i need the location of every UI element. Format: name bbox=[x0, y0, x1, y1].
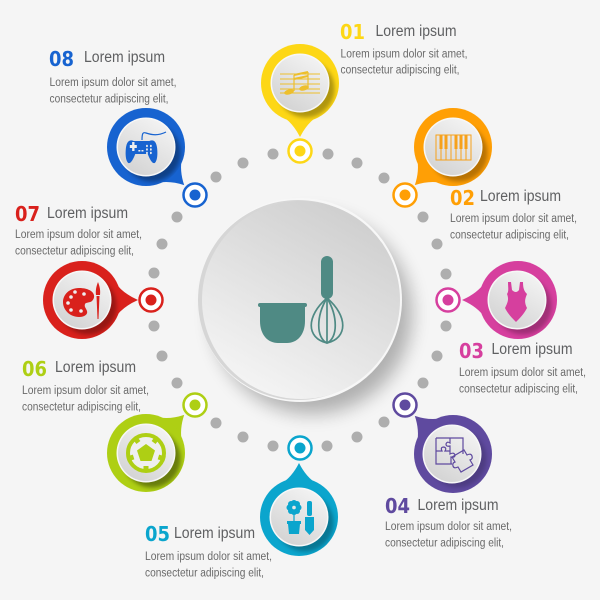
step 08 marker bbox=[107, 108, 206, 206]
step 02 text: Lorem ipsum bbox=[480, 188, 561, 205]
step 08 text: Lorem ipsum dolor sit amet, bbox=[50, 77, 176, 89]
step 05 marker bbox=[260, 436, 338, 556]
step 01 marker bbox=[261, 44, 339, 162]
step 08 text: 08 bbox=[49, 47, 74, 71]
step 05 text: 05 bbox=[145, 522, 170, 546]
step 06 text: Lorem ipsum dolor sit amet, bbox=[22, 385, 149, 397]
step 07 marker bbox=[43, 261, 162, 339]
step 06 text bbox=[22, 357, 149, 414]
step 02 marker bbox=[394, 108, 492, 206]
step 05 text: Lorem ipsum dolor sit amet, bbox=[145, 551, 272, 563]
icon: swimsuit bbox=[505, 282, 527, 322]
icon: flower pot and trowel bbox=[286, 500, 314, 535]
step 04 text: consectetur adipiscing elit, bbox=[385, 538, 504, 550]
step 02 text bbox=[450, 186, 577, 242]
step 08 text: Lorem ipsum bbox=[84, 49, 165, 66]
step 04 text: Lorem ipsum dolor sit amet, bbox=[385, 521, 512, 533]
step 06 text: Lorem ipsum bbox=[55, 359, 136, 376]
icon: soccer ball bbox=[127, 435, 165, 472]
step 06 text: consectetur adipiscing elit, bbox=[22, 402, 141, 414]
step 05 text bbox=[145, 522, 272, 580]
step 03 text: consectetur adipiscing elit, bbox=[459, 384, 578, 396]
icon: bowl and whisk bbox=[258, 256, 343, 343]
step 04 text bbox=[385, 494, 512, 550]
step 08 text: consectetur adipiscing elit, bbox=[50, 94, 168, 106]
step 02 text: 02 bbox=[450, 186, 475, 210]
step 07 text: Lorem ipsum bbox=[47, 205, 128, 222]
step 06 marker bbox=[107, 394, 206, 492]
step 01 text: Lorem ipsum bbox=[376, 23, 456, 40]
step 02 text: Lorem ipsum dolor sit amet, bbox=[450, 213, 577, 225]
step 01 text bbox=[340, 20, 468, 76]
step 03 text: 03 bbox=[459, 339, 484, 363]
step 04 text: 04 bbox=[385, 494, 410, 518]
central disc bbox=[198, 198, 412, 414]
step 07 text: consectetur adipiscing elit, bbox=[15, 246, 134, 258]
step 07 text: Lorem ipsum dolor sit amet, bbox=[15, 229, 142, 241]
step 05 text: Lorem ipsum bbox=[174, 525, 255, 542]
icon: puzzle pieces bbox=[436, 438, 473, 472]
step 01 text: consectetur adipiscing elit, bbox=[340, 64, 460, 76]
icon: piano keys bbox=[436, 135, 471, 160]
icon: paint palette and brush bbox=[63, 282, 100, 319]
step 06 text: 06 bbox=[22, 357, 47, 381]
icon: music notes bbox=[280, 72, 320, 96]
step 04 marker bbox=[394, 394, 492, 493]
step 08 text bbox=[49, 47, 176, 106]
dotted ring bbox=[148, 148, 452, 452]
step 03 marker bbox=[436, 261, 557, 339]
step 03 text: Lorem ipsum bbox=[492, 341, 572, 358]
step 04 text: Lorem ipsum bbox=[418, 497, 498, 514]
step 02 text: consectetur adipiscing elit, bbox=[450, 230, 569, 242]
icon: game controller bbox=[126, 132, 166, 163]
step 03 text bbox=[459, 339, 586, 396]
step 05 text: consectetur adipiscing elit, bbox=[145, 568, 264, 580]
step 07 text: 07 bbox=[15, 202, 40, 226]
step 01 text: 01 bbox=[340, 20, 365, 44]
step 01 text: Lorem ipsum dolor sit amet, bbox=[340, 48, 468, 60]
step 03 text: Lorem ipsum dolor sit amet, bbox=[459, 367, 586, 379]
step 07 text bbox=[15, 202, 142, 258]
